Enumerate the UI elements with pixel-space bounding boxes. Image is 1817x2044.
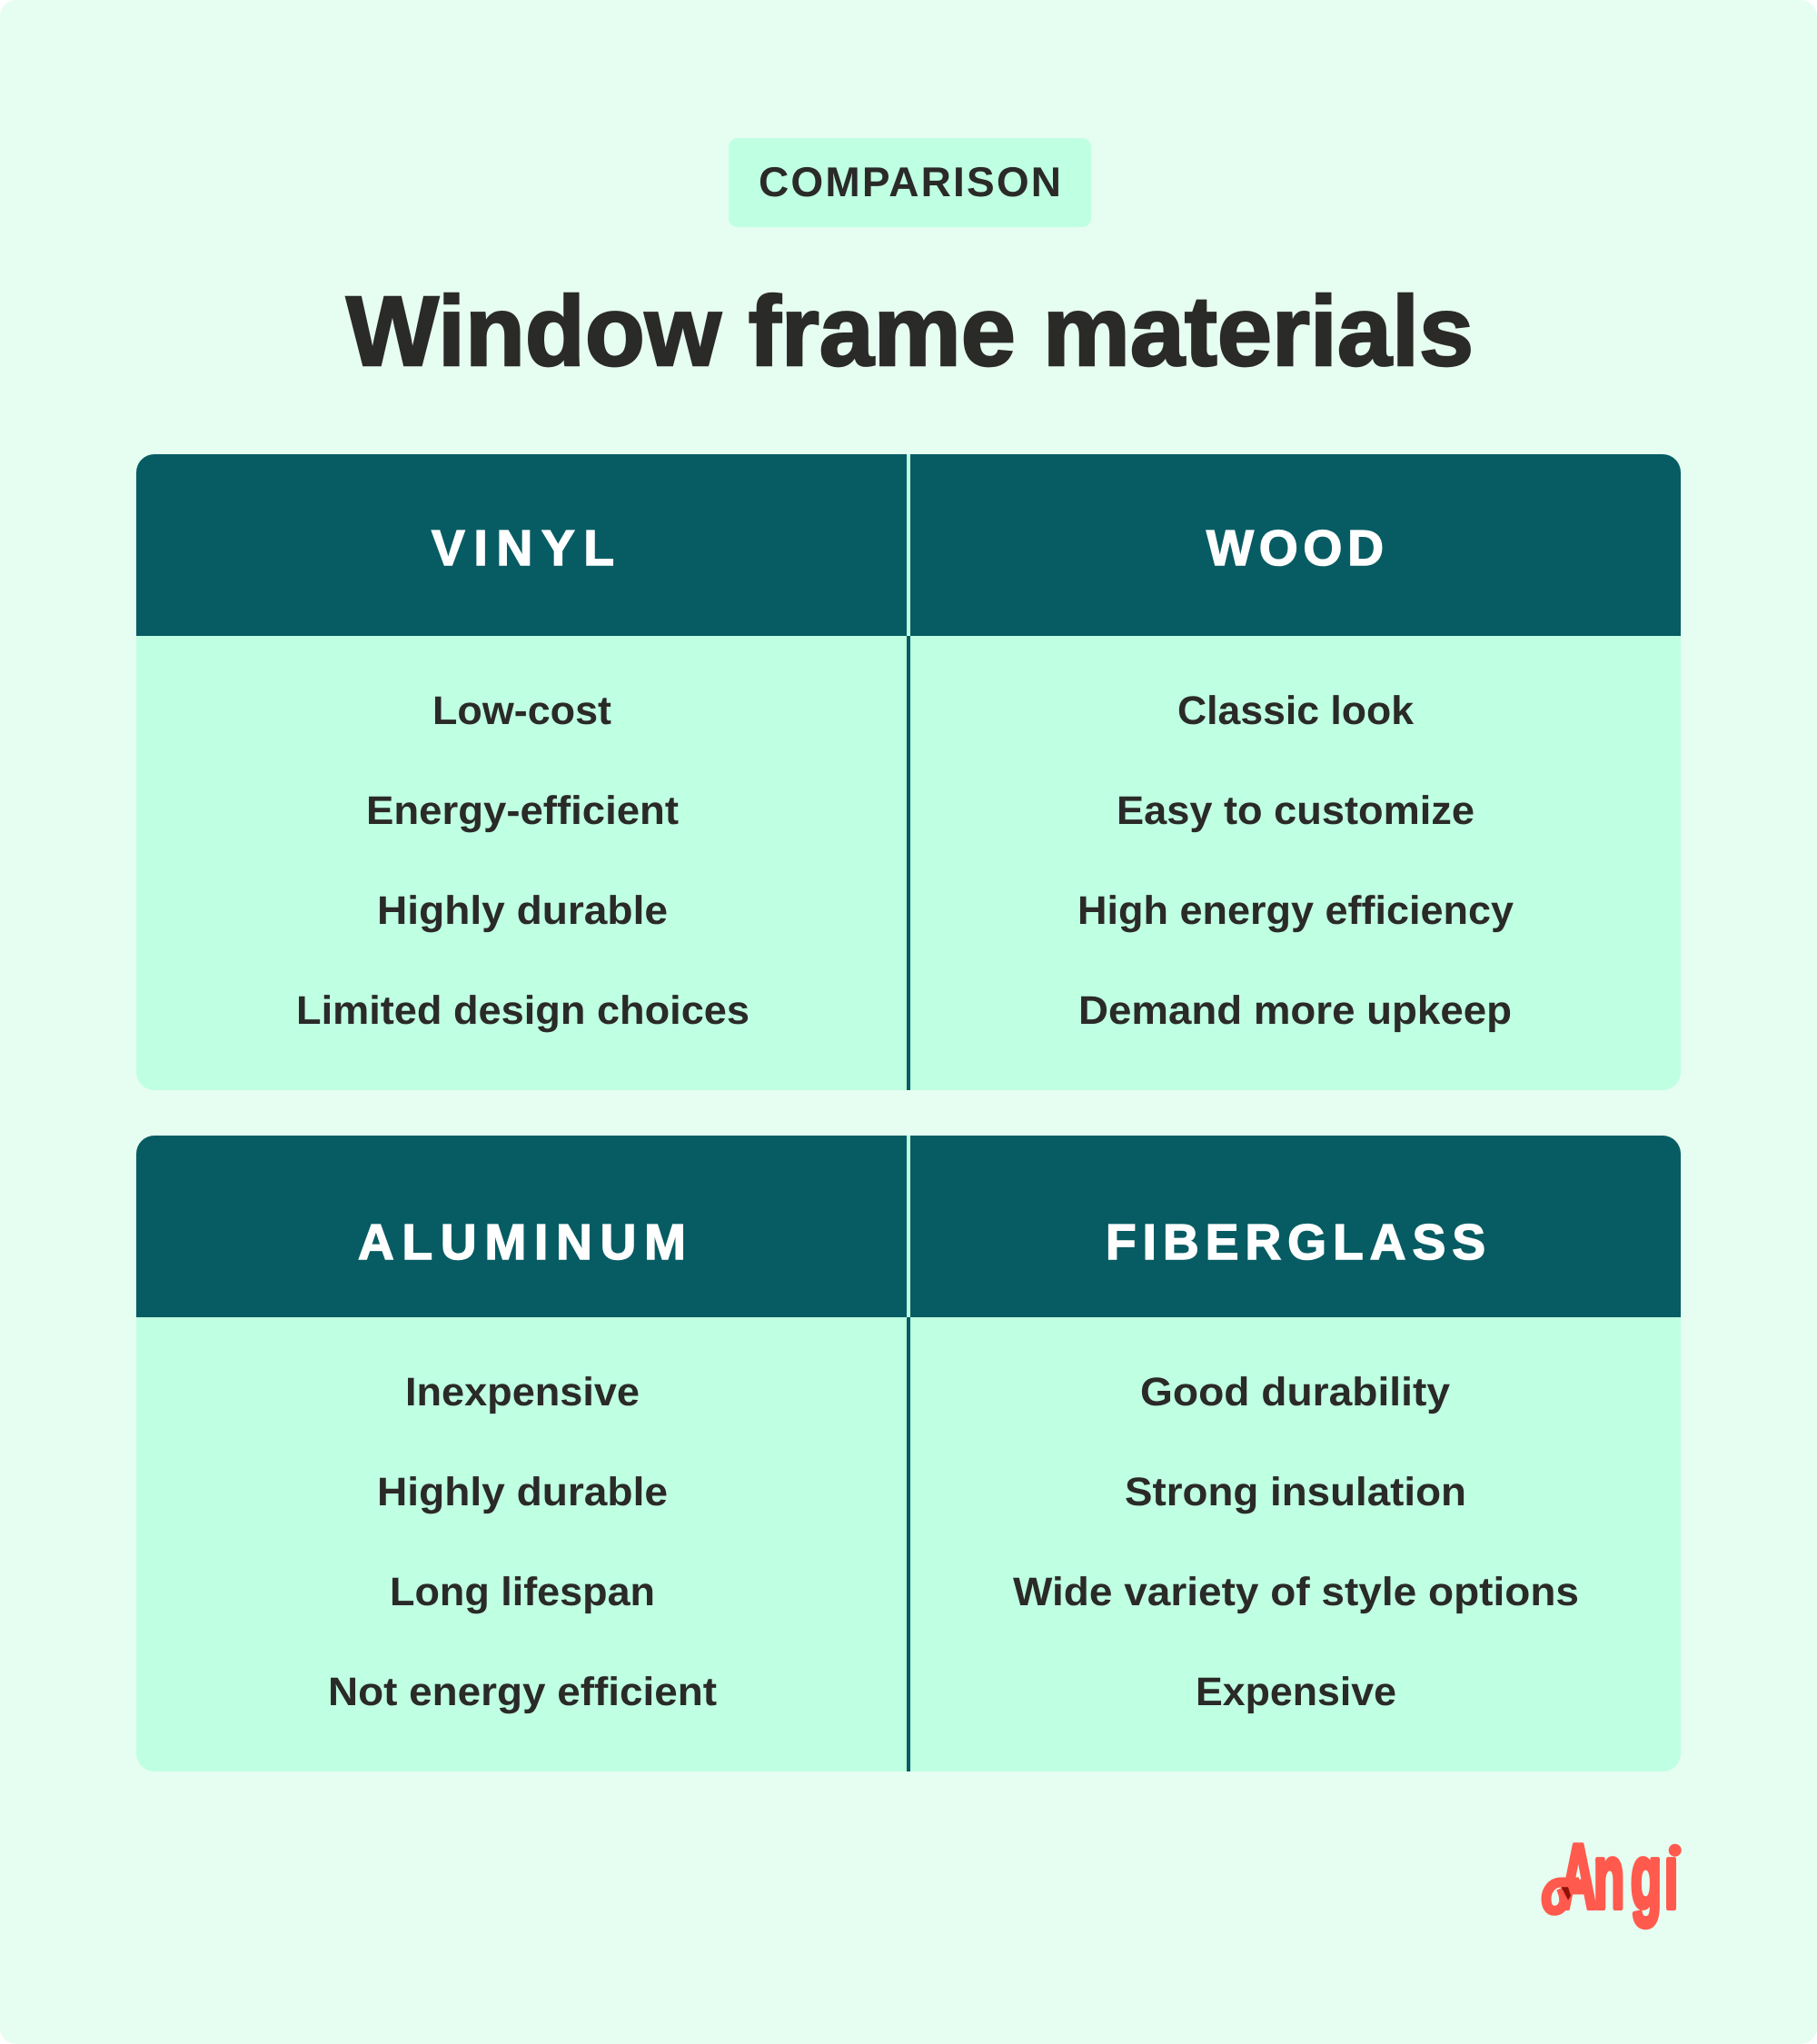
column: fiberglass: Strong insulation bbox=[1125, 1470, 1466, 1514]
column: vinyl: VINYL bbox=[432, 520, 614, 576]
column: wood: High energy efficiency bbox=[1077, 888, 1514, 933]
column: wood: WOOD bbox=[1206, 520, 1384, 576]
panel: aluminum and fiberglass bbox=[136, 1136, 1681, 1771]
column: vinyl: Energy-efficient bbox=[366, 789, 679, 833]
column: aluminum: Not energy efficient bbox=[328, 1670, 717, 1714]
column: vinyl bbox=[296, 520, 750, 1033]
panel: vinyl and wood bbox=[136, 454, 1681, 1090]
title: Window frame materials bbox=[346, 276, 1474, 387]
column: fiberglass: Good durability bbox=[1140, 1370, 1451, 1414]
column: vinyl: Low-cost bbox=[432, 689, 611, 733]
column: wood: Easy to customize bbox=[1117, 789, 1474, 833]
column: fiberglass: Expensive bbox=[1196, 1670, 1396, 1714]
badge: comparison bbox=[729, 138, 1091, 227]
column: aluminum: Long lifespan bbox=[390, 1570, 655, 1614]
column: fiberglass bbox=[1013, 1214, 1579, 1714]
column: aluminum: ALUMINUM bbox=[358, 1214, 686, 1270]
column: wood: Classic look bbox=[1177, 689, 1415, 733]
column: aluminum: Inexpensive bbox=[405, 1370, 640, 1414]
column: wood bbox=[1077, 520, 1514, 1033]
column: fiberglass: Wide variety of style options bbox=[1013, 1570, 1579, 1614]
column: vinyl: Limited design choices bbox=[296, 988, 750, 1033]
column: fiberglass: FIBERGLASS bbox=[1106, 1214, 1485, 1270]
logo: Angi: Angi bbox=[1560, 1826, 1678, 1928]
column: vinyl: Highly durable bbox=[377, 888, 668, 933]
column: aluminum: Highly durable bbox=[377, 1470, 668, 1514]
column: wood: Demand more upkeep bbox=[1078, 988, 1512, 1033]
column: aluminum bbox=[328, 1214, 717, 1714]
badge: comparison: COMPARISON bbox=[759, 158, 1061, 205]
